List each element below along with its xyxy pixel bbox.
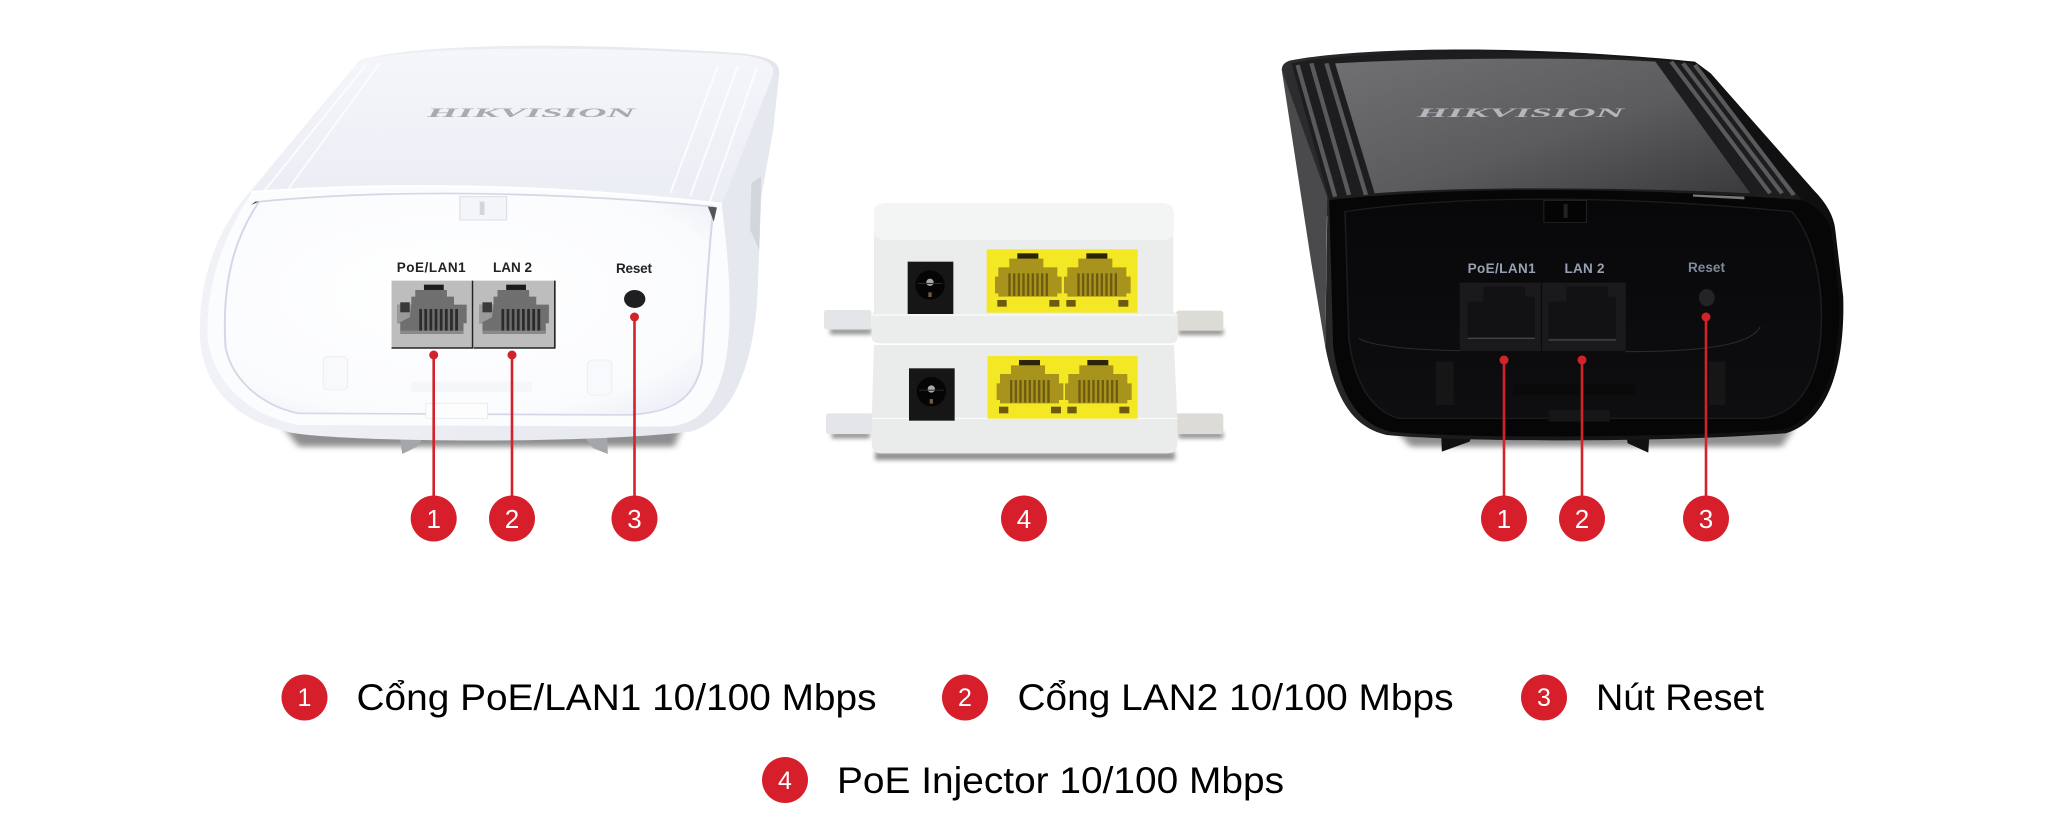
port label: Reset dark: Reset — [1688, 260, 1726, 275]
legend item 1: 1 — [298, 684, 311, 712]
posts and latch: black unit — [1359, 327, 1760, 422]
device: black outdoor unit — [1282, 50, 1843, 453]
callout 1 white unit: 1 — [426, 504, 441, 534]
wings: injector — [824, 310, 1223, 434]
callout 2 white unit: 2 — [505, 504, 519, 534]
device: white outdoor unit — [200, 46, 779, 454]
port label: LAN 2 dark: LAN 2 — [1564, 261, 1604, 276]
legend item 1: Cổng PoE/LAN1 10/100 Mbps — [356, 676, 876, 718]
callout 2 black unit — [1559, 356, 1605, 542]
callout 2 white unit — [489, 350, 535, 542]
top cover: white unit — [251, 49, 773, 205]
logo: black unit: HIKVISION — [1414, 105, 1626, 120]
callout 3 black unit: 3 — [1699, 504, 1713, 534]
bottom injector body — [872, 345, 1177, 453]
shadows: injector — [830, 328, 1223, 460]
left side wall: black unit — [1282, 70, 1327, 347]
callout 3 white unit — [612, 312, 658, 542]
reset button: black unit — [1699, 289, 1715, 306]
clip: black unit — [1544, 201, 1587, 222]
shadow: white unit — [283, 427, 682, 447]
body: white unit silhouette — [200, 46, 779, 441]
callout 4 injector — [1001, 496, 1047, 542]
highlight: black unit — [1693, 194, 1744, 199]
front bezel: white unit — [208, 187, 730, 427]
legend item 4: 4 — [778, 767, 792, 795]
callout 1 black unit — [1481, 356, 1527, 542]
callout 1 black unit: 1 — [1497, 504, 1511, 534]
port label: LAN 2: LAN 2 — [493, 260, 532, 275]
top injector body — [872, 203, 1178, 343]
legend item 4: PoE Injector 10/100 Mbps — [837, 759, 1284, 801]
ports: white unit — [392, 281, 555, 349]
port panel: black unit — [1460, 283, 1626, 351]
feet: black unit — [1441, 433, 1649, 453]
clip: white unit — [460, 197, 507, 220]
port label: PoE/LAN1 dark: PoE/LAN1 — [1468, 261, 1536, 276]
legend item 3 — [1521, 674, 1765, 720]
callout 4 injector: 4 — [1017, 504, 1031, 534]
port label: Reset: Reset — [616, 261, 652, 276]
posts and latch: white unit — [323, 357, 612, 418]
legend item 2: 2 — [958, 684, 972, 712]
port label: PoE/LAN1: PoE/LAN1 — [397, 260, 466, 275]
legend item 3: 3 — [1537, 684, 1551, 712]
legend item 2: Cổng LAN2 10/100 Mbps — [1018, 676, 1454, 718]
feet: white unit — [399, 435, 608, 454]
device: PoE injectors — [824, 203, 1223, 460]
callout 3 black unit — [1683, 312, 1729, 542]
logo: white unit: HIKVISION — [424, 105, 637, 120]
cavity: black unit — [1345, 199, 1821, 418]
top cover: black unit — [1292, 52, 1802, 200]
body: black unit silhouette — [1282, 50, 1843, 440]
callout 1 white unit — [411, 350, 457, 542]
legend item 3: Nút Reset — [1596, 676, 1765, 718]
shadow: black unit — [1394, 428, 1794, 447]
callout 3 white unit: 3 — [627, 504, 642, 534]
reset button: white unit — [624, 290, 645, 308]
right side wall: white unit — [690, 75, 779, 432]
cavity: white unit — [225, 193, 714, 415]
callout 2 black unit: 2 — [1575, 504, 1589, 534]
front face: black unit — [1329, 190, 1839, 436]
